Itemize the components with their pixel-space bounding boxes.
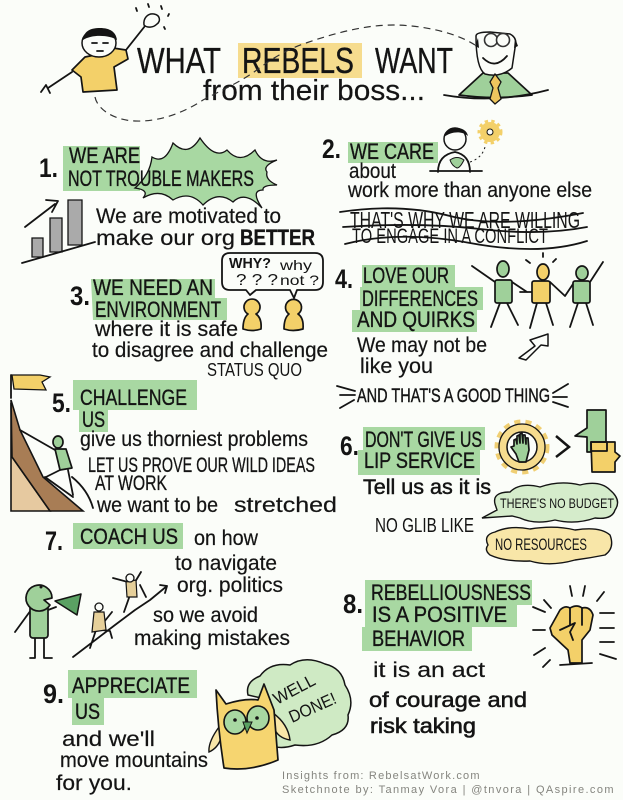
callout: good thing: [337, 384, 568, 408]
body text 8: [369, 659, 527, 738]
heading 9: APPRECIATE: [72, 673, 190, 698]
heading 9: US: [75, 699, 100, 724]
body text 7: making mistakes: [134, 627, 290, 650]
icon: raised fist with rays: [533, 586, 616, 667]
highlight 6: [358, 427, 485, 475]
icon: two talking faces: [575, 410, 620, 472]
heading 1: [68, 143, 254, 191]
heading 4: LOVE OUR: [363, 263, 449, 288]
icon: person with heart and gear: [430, 122, 500, 172]
heading 3: [93, 275, 221, 322]
highlight 8: [362, 580, 532, 651]
body text 1: BETTER: [240, 225, 315, 250]
icon: climber on mountain with flag: [11, 375, 93, 511]
body text 5: AT WORK: [95, 472, 167, 495]
speech cloud: no budget: [482, 483, 618, 522]
icon: three people holding hands: [472, 253, 603, 328]
body text 2: work more than anyone else: [347, 179, 592, 202]
body text 5: stretched: [234, 494, 337, 517]
speech cloud: well done: [248, 660, 351, 748]
credits: [282, 770, 614, 796]
number 5: 5.: [52, 388, 71, 418]
body text 2: [347, 160, 592, 202]
body text 5: LET US PROVE OUR WILD IDEAS: [88, 454, 315, 477]
speech bubble: not ?: [280, 272, 319, 288]
heading 8: REBELLIOUSNESS: [371, 580, 531, 605]
section 4: love our differences: [335, 253, 603, 408]
body text 5: give us thorniest problems: [80, 428, 308, 451]
heading 8: [371, 580, 531, 651]
heading 3: ENVIRONMENT: [95, 297, 221, 322]
body text 6: NO GLIB LIKE: [375, 515, 474, 537]
number 8: 8.: [343, 589, 363, 619]
speech bubble: ? ? ?: [236, 272, 278, 289]
heading 1: WE ARE: [69, 143, 140, 168]
body text 8: it is an act: [373, 659, 485, 682]
credits: Sketchnote by: Tanmay Vora | @tnvora | QAspire.com: [282, 784, 614, 796]
speech cloud: well done: DONE!: [286, 689, 339, 727]
section 8: rebelliousness: [343, 580, 616, 738]
heading 9: [72, 673, 190, 724]
body text 8: of courage and: [369, 689, 527, 712]
body text 5: [80, 428, 337, 517]
title: REBELS: [242, 40, 354, 81]
body text 9: and we'll: [62, 728, 155, 751]
body text 6: Tell us as it is: [363, 476, 491, 499]
body text 7: org. politics: [177, 574, 283, 597]
icon: gear with stop hand: [497, 422, 547, 472]
heading 4: DIFFERENCES: [362, 286, 478, 311]
body text 5: we want to be: [96, 494, 218, 517]
title: [137, 40, 453, 107]
heading 7: COACH US: [80, 524, 178, 549]
body text 6: [363, 476, 491, 537]
number 9: 9.: [43, 679, 64, 709]
body text 3: STATUS QUO: [207, 360, 302, 380]
body text 3: to disagree and challenge: [92, 339, 328, 362]
number 2: 2.: [322, 134, 341, 164]
highlight 4: [352, 265, 483, 332]
number 1: 1.: [39, 153, 58, 183]
body text 1: [96, 205, 315, 250]
body text 3: where it is safe: [94, 318, 238, 341]
highlight 7: [73, 523, 183, 549]
body text 8: risk taking: [370, 715, 476, 738]
number 4: 4.: [335, 264, 353, 294]
section 3: safe environment: [70, 253, 328, 380]
icon: smiling boss: [444, 32, 548, 104]
heading 5: US: [82, 407, 105, 432]
speech cloud: well done: WELL: [270, 671, 319, 709]
heading 3: WE NEED AN: [93, 275, 213, 300]
body text 7: to navigate: [175, 552, 277, 575]
dashed connector: [95, 25, 475, 121]
body text 1: We are motivated to: [96, 205, 281, 228]
highlight and burst: [63, 138, 277, 208]
title: WHAT: [137, 40, 221, 81]
heading 6: LIP SERVICE: [364, 448, 475, 473]
speech bubble: WHY?: [229, 255, 271, 272]
heading 5: CHALLENGE: [80, 385, 187, 410]
heading 4: AND QUIRKS: [357, 307, 475, 332]
icon: owl: [209, 684, 290, 769]
body text 4: We may not be: [357, 334, 487, 357]
highlight 9: [68, 670, 197, 725]
wavy banner text: [340, 207, 587, 249]
title: WANT: [375, 40, 453, 81]
body text 7: [134, 527, 290, 650]
highlight 3: [91, 279, 227, 320]
number 6: 6.: [340, 431, 359, 461]
body text 7: on how: [194, 527, 259, 550]
body text 7: so we avoid: [153, 604, 258, 627]
highlight 2: [348, 142, 438, 163]
highlight 5: [73, 380, 197, 432]
body text 9: for you.: [56, 772, 132, 795]
section 5: challenge us: [11, 375, 337, 517]
heading 2: WE CARE: [350, 139, 434, 164]
heading 8: BEHAVIOR: [372, 626, 465, 651]
heading 1: NOT TROUBLE MAKERS: [68, 166, 254, 191]
icon: two people: [243, 299, 303, 330]
speech bubble: [222, 253, 323, 298]
section 2: we care: [322, 122, 592, 249]
title: from their boss...: [203, 75, 425, 107]
section 7: coach us: [15, 523, 290, 658]
heading 5: [80, 385, 187, 432]
heading 6: DON'T GIVE US: [365, 427, 482, 452]
number 7: 7.: [45, 526, 63, 556]
body text 9: [56, 728, 208, 795]
heading 6: [364, 427, 482, 473]
body text 2: about: [349, 160, 396, 183]
number 3: 3.: [70, 281, 90, 311]
body text 9: move mountains: [60, 749, 208, 772]
section 1: not trouble makers: [22, 138, 315, 263]
speech cloud: no resources: [486, 527, 612, 564]
arrow: [519, 334, 548, 360]
callout: good thing: AND THAT'S A GOOD THING: [357, 386, 550, 407]
icon: rebel raising fist: [41, 4, 169, 93]
section 9: appreciate us: [43, 660, 351, 795]
icon: figure with megaphone and climbers: [15, 572, 167, 658]
chart icon: rising bars: [22, 200, 95, 263]
icon: greater than sign: [556, 436, 569, 457]
body text 4: [357, 334, 487, 378]
body text 3: [92, 318, 328, 380]
body text 1: make our org: [96, 227, 235, 250]
credits: Insights from: RebelsatWork.com: [282, 770, 480, 782]
body text 4: like you: [360, 355, 433, 378]
heading 8: IS A POSITIVE: [372, 602, 507, 627]
heading 4: [357, 263, 478, 332]
section 6: don't give us lip service: [340, 410, 620, 564]
speech bubble: why: [279, 257, 312, 273]
